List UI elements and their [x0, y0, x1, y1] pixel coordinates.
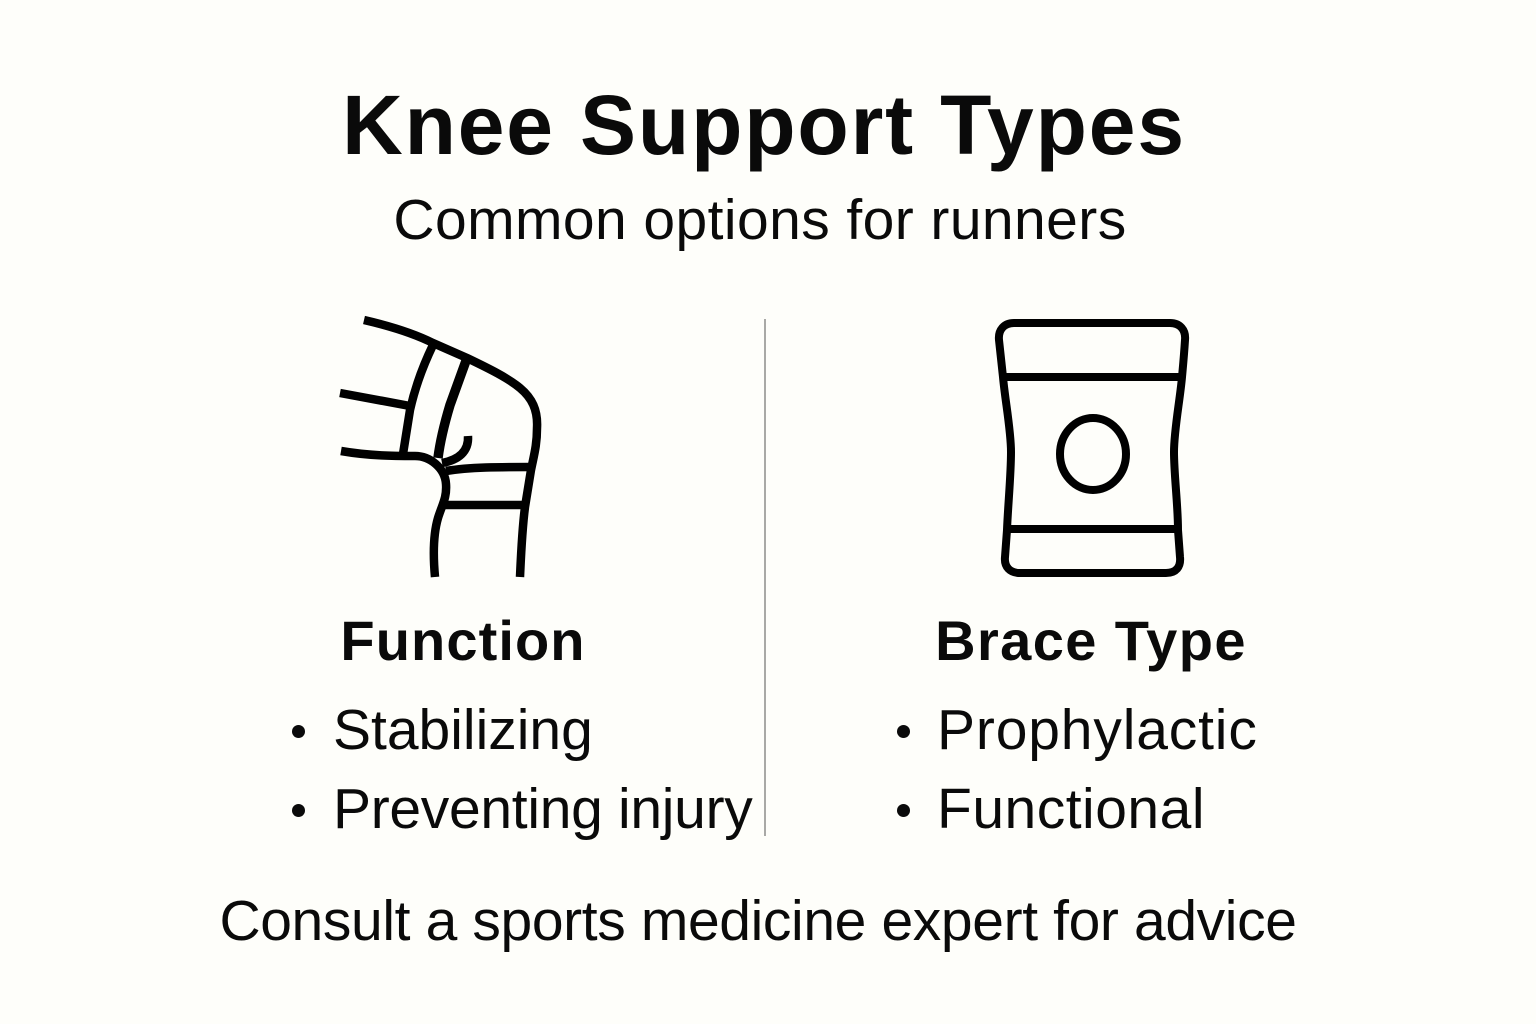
subtitle: Common options for runners	[393, 188, 1127, 252]
list: function	[292, 698, 753, 841]
footer note: Consult a sports medicine expert for advice	[219, 889, 1297, 953]
bullet item: Prophylactic	[937, 698, 1258, 762]
divider	[764, 319, 766, 836]
icon: knee brace	[994, 319, 1190, 577]
list: brace type	[897, 698, 1258, 841]
heading: Function: Function	[340, 609, 586, 672]
heading: Brace Type: Brace Type	[935, 609, 1247, 672]
bullet item: Preventing injury	[333, 777, 752, 841]
icon: knee with support straps	[339, 316, 542, 578]
bullet item: Functional	[937, 777, 1205, 841]
bullet item: Stabilizing	[333, 698, 593, 762]
title: Knee Support Types	[342, 78, 1186, 172]
